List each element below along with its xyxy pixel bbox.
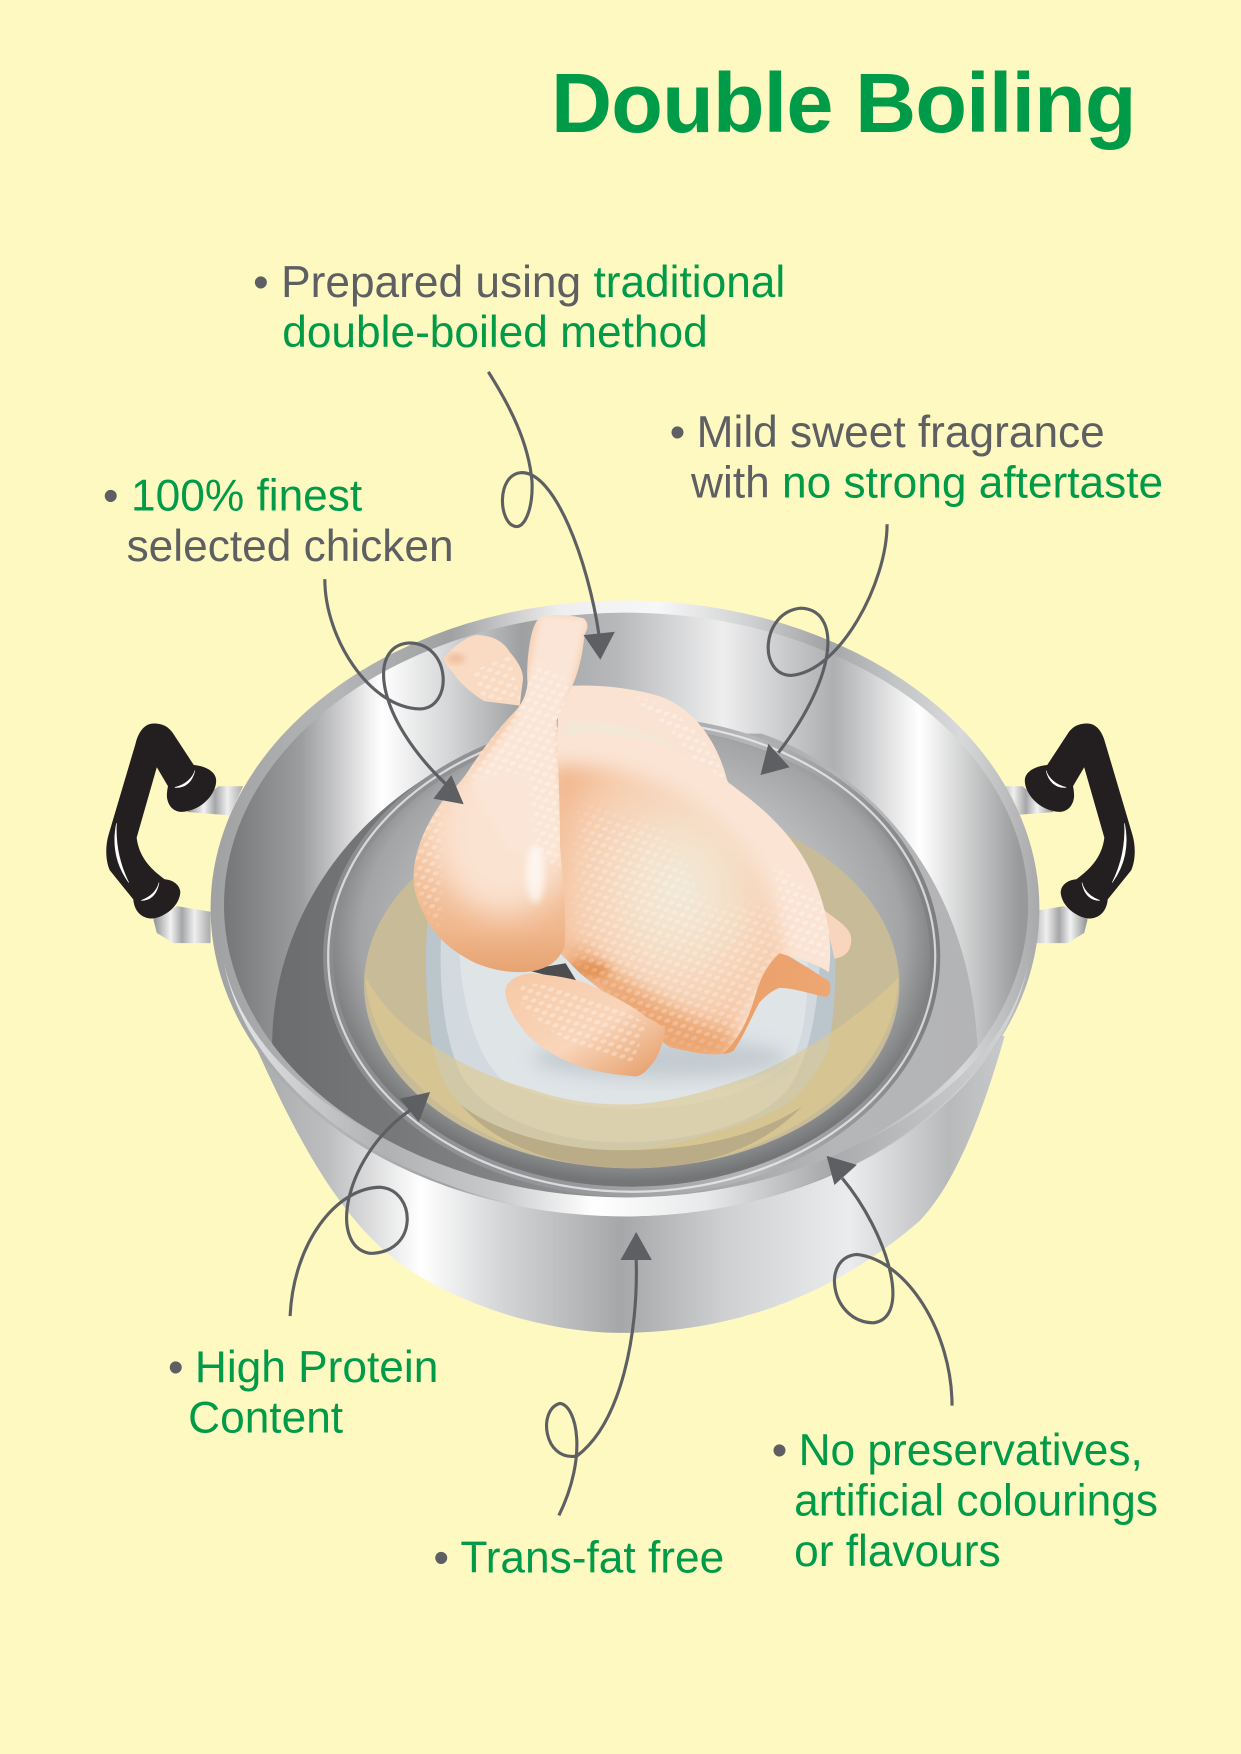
chicken shadow — [532, 1038, 790, 1079]
arrow: trans-fat — [547, 1232, 652, 1515]
chicken thigh and drumstick — [414, 615, 588, 972]
text: traditional method: double-boiled method — [282, 308, 708, 357]
text: chicken: • — [103, 472, 119, 521]
dish bright plate — [459, 896, 807, 1109]
text: fragrance: with no strong aftertaste — [690, 458, 1163, 507]
water shadow around inner bowl — [272, 734, 978, 1232]
thigh highlight — [526, 845, 544, 903]
pot interior wall — [224, 613, 1028, 1197]
body base — [557, 740, 830, 1054]
text: protein — [168, 1343, 438, 1443]
thigh light — [435, 754, 573, 915]
wing texture — [521, 983, 647, 1062]
text: no preservatives — [772, 1426, 1158, 1576]
arrow: protein — [290, 1092, 430, 1316]
text: no preservatives: artificial colourings — [794, 1476, 1158, 1525]
pot body — [251, 1036, 1005, 1333]
chicken tail — [823, 909, 851, 959]
arrow: no preservatives — [827, 1156, 952, 1406]
soup foreground crescent — [365, 977, 898, 1168]
pot outer rim — [211, 600, 1039, 1216]
breast — [538, 766, 784, 1058]
arrow: fragrance — [761, 524, 887, 775]
text: protein: High Protein — [195, 1343, 438, 1392]
title: Double Boiling — [551, 55, 1136, 150]
text: fragrance — [670, 408, 1163, 507]
chicken shadow sliver — [526, 963, 578, 983]
chicken back shading — [566, 722, 683, 753]
far leg texture — [470, 655, 521, 700]
arrow: traditional method — [488, 372, 615, 660]
far leg end hollow — [447, 654, 465, 663]
text: no preservatives: No preservatives, — [799, 1426, 1143, 1475]
soup — [364, 801, 899, 1168]
soup dark lower band — [460, 1104, 802, 1168]
text: fragrance: • — [670, 408, 685, 457]
dish inner plate — [441, 896, 821, 1142]
pot — [211, 600, 1039, 1333]
inner dish — [426, 896, 835, 1150]
text: traditional method — [253, 258, 785, 357]
text: traditional method: Prepared using traditional — [281, 258, 785, 307]
text: traditional method: • — [253, 258, 269, 307]
chicken back hump — [557, 685, 739, 806]
body scales — [573, 810, 827, 1051]
text: fragrance: Mild sweet fragrance — [697, 408, 1105, 457]
body orange corner — [560, 961, 609, 979]
icon: left pot handle — [106, 724, 243, 943]
text: no preservatives: or flavours — [794, 1527, 1001, 1576]
text: chicken — [103, 472, 454, 571]
text: trans-fat: • — [433, 1534, 449, 1583]
text: protein: Content — [188, 1394, 343, 1443]
arrow: chicken — [325, 579, 464, 804]
drumstick light — [470, 614, 588, 862]
chicken flap — [717, 951, 830, 1054]
icon: right pot handle — [998, 724, 1135, 943]
chicken back texture — [627, 694, 726, 780]
body lower shading — [560, 946, 739, 1064]
text: chicken: selected chicken — [127, 522, 454, 571]
text: protein: • — [168, 1343, 184, 1392]
chicken — [403, 605, 851, 1079]
inner bowl rim highlight — [328, 721, 935, 1192]
thigh base — [414, 615, 588, 972]
text: trans-fat: Trans-fat free — [460, 1534, 724, 1583]
chicken wing — [505, 973, 665, 1076]
chicken body — [557, 740, 830, 1054]
text: no preservatives: • — [772, 1426, 787, 1475]
chicken far leg tip — [444, 635, 523, 706]
thigh scales — [414, 668, 569, 926]
inner bowl rim — [328, 721, 935, 1192]
text: chicken: 100% finest — [131, 472, 362, 521]
pot front lip — [224, 963, 1028, 1216]
